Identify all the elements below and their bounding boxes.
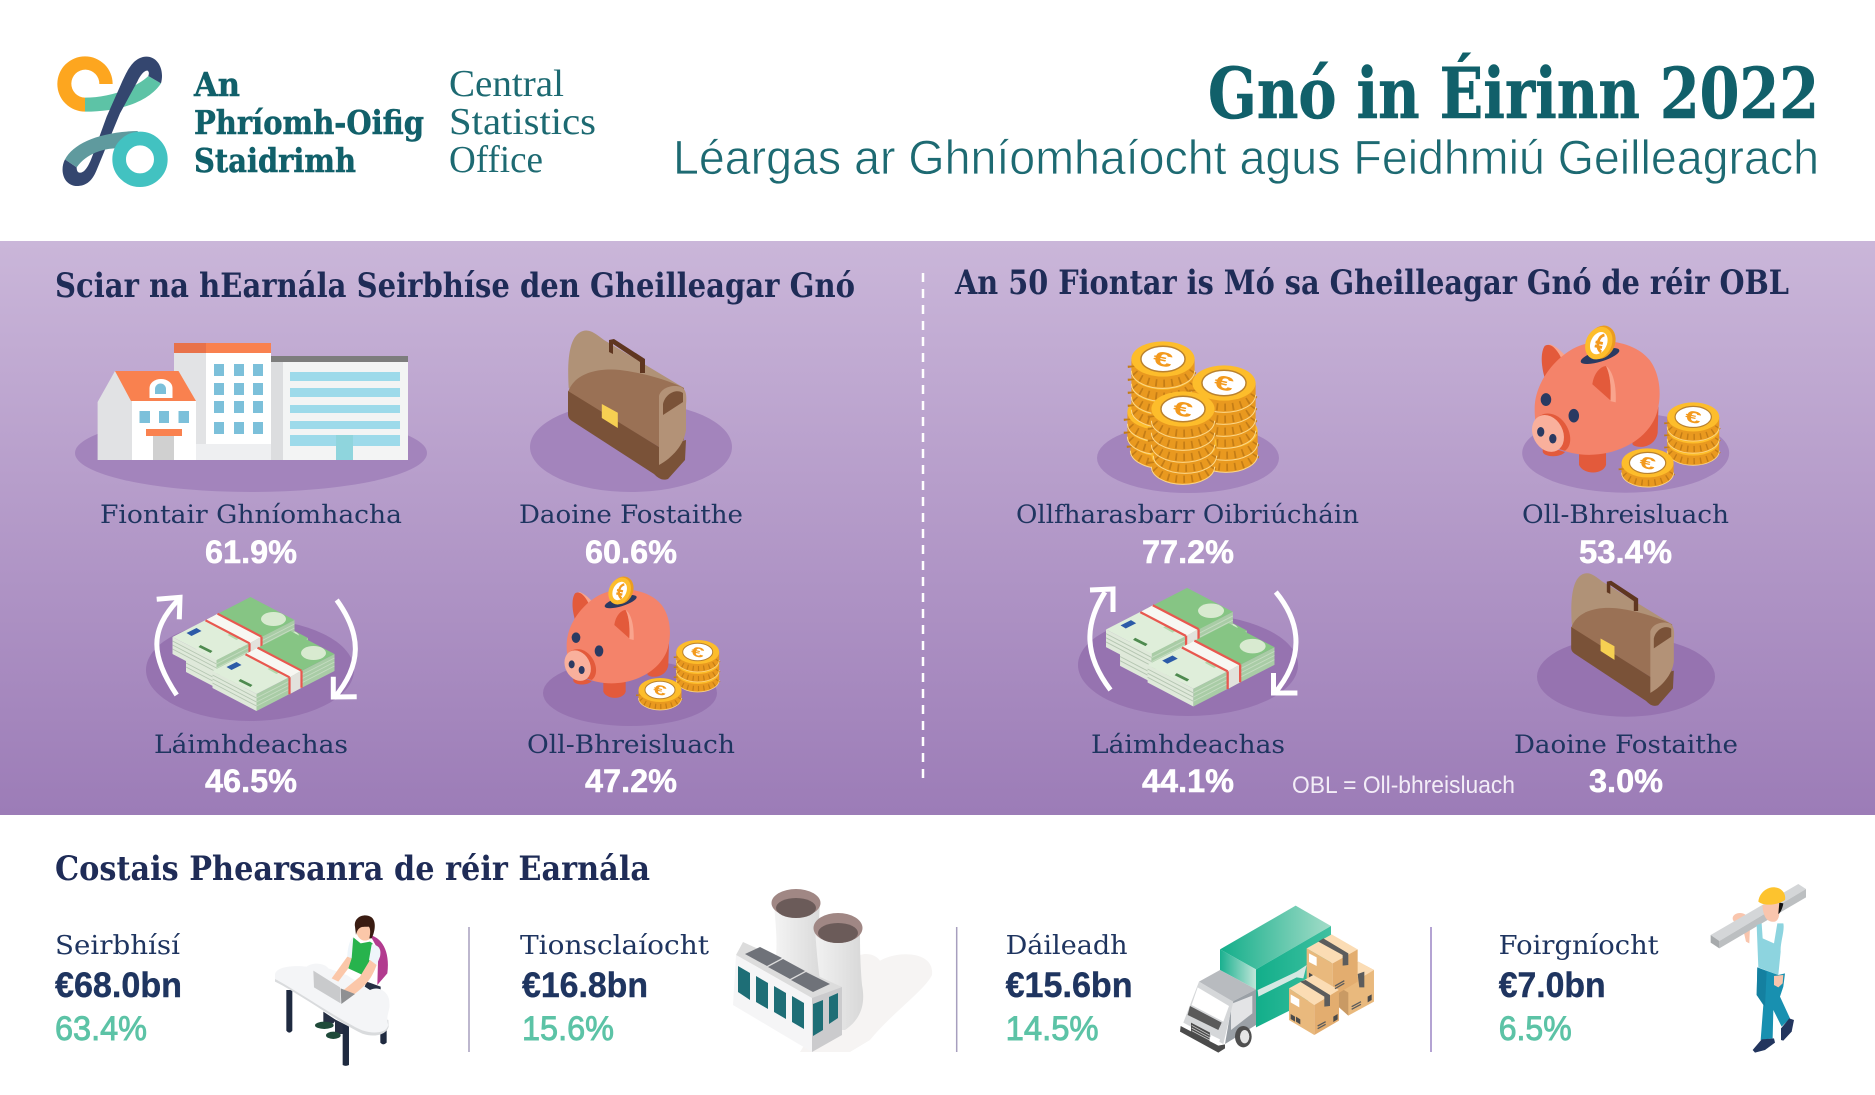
value: 77.2% bbox=[1142, 534, 1234, 570]
label: Daoine Fostaithe bbox=[519, 500, 743, 530]
panel: enterprises metric bbox=[75, 343, 427, 570]
share value: 14.5% bbox=[1006, 1010, 1099, 1048]
icon: briefcase bbox=[530, 331, 732, 492]
value: 3.0% bbox=[1589, 763, 1663, 799]
cost value: €68.0bn bbox=[55, 966, 182, 1005]
value: 53.4% bbox=[1579, 534, 1672, 570]
panel: background band bbox=[0, 241, 1875, 815]
value: 61.9% bbox=[205, 534, 297, 570]
label: Tionsclaíocht bbox=[520, 931, 710, 961]
panel: turnover metric bbox=[146, 597, 357, 799]
icon: coin stacks bbox=[1097, 341, 1279, 493]
label: Láimhdeachas bbox=[154, 730, 348, 760]
panel: industry sector bbox=[520, 889, 932, 1052]
label: Seirbhísí bbox=[55, 931, 181, 961]
panel: top 50 gross value added metric bbox=[1522, 321, 1729, 570]
icon: construction worker bbox=[1711, 884, 1806, 1053]
share value: 6.5% bbox=[1499, 1010, 1572, 1048]
logo text: Irish name: Phríomh-Oifig bbox=[194, 103, 424, 142]
panel: top 50 turnover metric bbox=[1078, 588, 1298, 799]
label: Dáileadh bbox=[1006, 931, 1128, 961]
panel heading: services share: Sciar na hEarnála Seirbhíse den Gheilleagar Gnó bbox=[55, 266, 855, 306]
logo text: English name: Office bbox=[449, 139, 543, 181]
value: 60.6% bbox=[585, 534, 677, 570]
value: 44.1% bbox=[1142, 763, 1234, 799]
label: Foirgníocht bbox=[1499, 931, 1659, 961]
value: 47.2% bbox=[585, 763, 677, 799]
logo: CSO mark bbox=[57, 56, 162, 186]
logo text: English name: Central bbox=[449, 63, 564, 105]
icon: factory bbox=[733, 889, 932, 1052]
label: Fiontair Ghníomhacha bbox=[100, 500, 402, 530]
label: Daoine Fostaithe bbox=[1514, 730, 1738, 760]
logo text: Irish name: An bbox=[193, 65, 240, 104]
panel: operating surplus metric bbox=[1016, 341, 1359, 570]
panel: employees metric bbox=[519, 331, 743, 570]
label: Oll-Bhreisluach bbox=[1522, 500, 1729, 530]
cost value: €16.8bn bbox=[522, 966, 648, 1005]
icon: piggy bank bbox=[1522, 321, 1729, 493]
icon: truck and boxes bbox=[1180, 906, 1374, 1053]
label: Oll-Bhreisluach bbox=[527, 730, 735, 760]
logo text: Irish name: Staidrimh bbox=[194, 141, 356, 180]
logo text: English name bbox=[449, 63, 596, 181]
value: 46.5% bbox=[205, 763, 297, 799]
icon: money with arrows bbox=[1078, 588, 1298, 716]
icon: person at desk bbox=[275, 915, 390, 1066]
share value: 63.4% bbox=[55, 1010, 147, 1048]
cost value: €7.0bn bbox=[1499, 966, 1606, 1005]
logo text: English name: Statistics bbox=[449, 101, 596, 143]
icon: buildings bbox=[75, 343, 427, 492]
panel: services sector bbox=[55, 915, 390, 1066]
icon: money with arrows bbox=[146, 597, 357, 721]
icon: piggy bank bbox=[543, 573, 719, 726]
share value: 15.6% bbox=[522, 1010, 614, 1048]
panel: distribution sector bbox=[1006, 906, 1374, 1053]
label: Ollfharasbarr Oibriúcháin bbox=[1016, 500, 1359, 530]
footnote: OBL definition: OBL = Oll-bhreisluach bbox=[1292, 772, 1515, 799]
panel: gross value added metric bbox=[527, 573, 735, 799]
panel: top 50 employees metric bbox=[1514, 573, 1738, 799]
label: Láimhdeachas bbox=[1091, 730, 1285, 760]
logo text: Irish name bbox=[193, 65, 424, 180]
heading: personnel costs: Costais Phearsanra de réir Earnála bbox=[55, 849, 650, 889]
panel: construction sector bbox=[1499, 884, 1806, 1053]
cost value: €15.6bn bbox=[1006, 966, 1133, 1005]
subtitle: Léargas ar Ghníomhaíocht agus Feidhmiú Geilleagrach bbox=[673, 132, 1819, 185]
icon: briefcase bbox=[1537, 573, 1715, 717]
